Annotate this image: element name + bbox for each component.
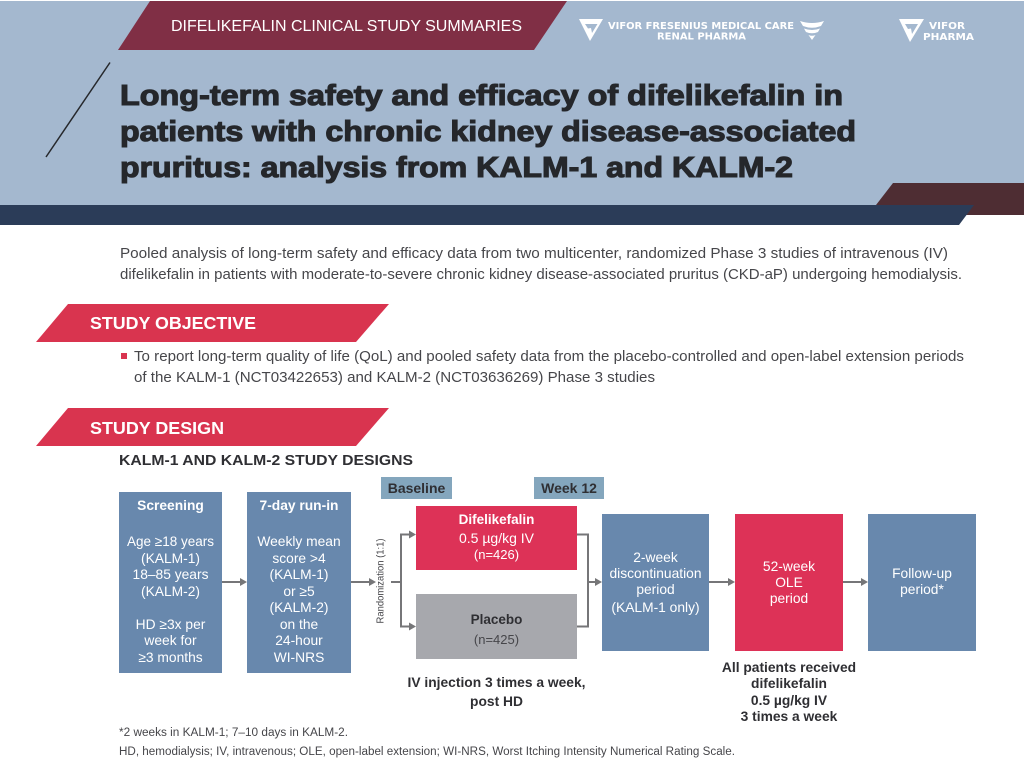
box: OLE: [735, 514, 843, 651]
box: run-in: 24-hour: [275, 633, 323, 648]
box: difelikefalin arm: Difelikefalin: [459, 512, 534, 527]
box: screening: (KALM-1): [141, 551, 200, 566]
box: screening: Age ≥18 years: [127, 534, 214, 549]
objective text: [121, 348, 964, 386]
title: Long-term safety and efficacy of difelikefalin in: [120, 80, 843, 112]
banner: study summaries: [118, 1, 567, 50]
caption: all patients: 0.5 µg/kg IV: [751, 693, 828, 708]
arrows: randomization split: [391, 530, 416, 630]
heading: study design: [36, 408, 389, 446]
heading: study objective: STUDY OBJECTIVE: [90, 313, 256, 333]
footnotes: *2 weeks in KALM-1; 7–10 days in KALM-2.: [119, 727, 348, 739]
box: screening: week for: [143, 633, 197, 648]
caption: IV injection: post HD: [470, 694, 523, 709]
box: OLE: period: [770, 591, 808, 606]
decorative diagonal line: [46, 62, 110, 157]
header panel: [0, 1, 1024, 225]
heading: study design: STUDY DESIGN: [90, 418, 224, 438]
footnotes: HD, hemodialysis; IV, intravenous; OLE, open-label extension; WI-NRS, Worst Itching Intensity Numerical Rating Scale.: [119, 746, 735, 758]
box: discontinuation: discontinuation: [609, 566, 702, 581]
objective text: To report long-term quality of life (QoL) and pooled safety data from the placebo-controlled and open-label extension periods: [134, 348, 964, 365]
box: run-in: or ≥5: [283, 584, 315, 599]
decorative maroon corner: [876, 183, 1024, 215]
box: run-in: 7-day run-in: [260, 498, 338, 513]
objective text: of the KALM-1 (NCT03422653) and KALM-2 (NCT03636269) Phase 3 studies: [134, 369, 655, 386]
box: run-in: WI-NRS: [274, 650, 324, 665]
label: week 12: Week 12: [541, 480, 597, 496]
box: follow-up: [868, 514, 976, 651]
logo: Vifor Fresenius Medical Care Renal Pharma: [579, 19, 824, 42]
box: follow-up: Follow-up: [892, 566, 952, 581]
box: discontinuation: 2-week: [633, 550, 678, 565]
box: difelikefalin arm: [416, 506, 577, 570]
caption: IV injection: [408, 675, 585, 709]
box: placebo arm: [416, 594, 577, 659]
footnotes: [119, 727, 735, 758]
box: run-in: score >4: [272, 551, 326, 566]
label: week 12: [534, 477, 604, 499]
box: screening: Screening: [137, 498, 204, 513]
bullet: [121, 353, 127, 359]
box: placebo arm: Placebo: [471, 612, 522, 627]
box: run-in: (KALM-1): [269, 567, 329, 582]
arrows: arms to discontinuation: [577, 534, 602, 626]
label: baseline: Baseline: [388, 480, 446, 496]
box: OLE: 52-week: [763, 559, 815, 574]
label: baseline: [381, 477, 452, 499]
logo: Vifor Fresenius Medical Care Renal Pharma: RENAL PHARMA: [657, 32, 746, 42]
box: screening: ≥3 months: [138, 650, 203, 665]
box: discontinuation: [602, 514, 709, 651]
arrow: OLE to follow-up: [843, 578, 868, 586]
box: discontinuation: period: [636, 582, 675, 597]
box: run-in: (KALM-2): [269, 600, 329, 615]
caption: all patients: [722, 660, 856, 724]
intro text: Pooled analysis of long-term safety and efficacy data from two multicenter, randomized Phase 3 studies of intravenous (IV): [120, 245, 948, 262]
box: screening: HD ≥3x per: [136, 617, 206, 632]
logo: Vifor Pharma: VIFOR: [929, 21, 965, 32]
box: run-in: on the: [280, 617, 319, 632]
subheading: study designs: KALM-1 AND KALM-2 STUDY DESIGNS: [119, 453, 413, 469]
logo: Vifor Pharma: PHARMA: [923, 32, 974, 43]
box: discontinuation: (KALM-1 only): [611, 600, 700, 615]
logo: Vifor Fresenius Medical Care Renal Pharma: VIFOR FRESENIUS MEDICAL CARE: [608, 21, 794, 32]
caption: all patients: 3 times a week: [741, 709, 838, 724]
caption: all patients: All patients received: [722, 660, 856, 675]
title: patients with chronic kidney disease-associated: [120, 116, 856, 148]
box: difelikefalin arm: 0.5 µg/kg IV: [459, 530, 535, 546]
title: [120, 80, 856, 184]
label: randomization: Randomization (1:1): [376, 538, 386, 624]
box: follow-up: period*: [900, 582, 944, 597]
arrow: screening to run-in: [222, 578, 247, 586]
intro text: difelikefalin in patients with moderate-to-severe chronic kidney disease-associated pruritus (CKD-aP) undergoing hemodialysis.: [120, 266, 962, 283]
arrow: discontinuation to OLE: [709, 578, 735, 586]
caption: all patients: difelikefalin: [751, 676, 827, 691]
dark blue bar: [0, 205, 974, 225]
box: run-in: Weekly mean: [257, 534, 341, 549]
arrow: run-in to randomization: [351, 578, 376, 586]
box: run-in: [247, 492, 351, 673]
box: difelikefalin arm: (n=426): [474, 547, 519, 562]
title: pruritus: analysis from KALM-1 and KALM-2: [120, 152, 793, 184]
logo: Vifor Pharma: [899, 19, 974, 43]
banner: study summaries: DIFELIKEFALIN CLINICAL STUDY SUMMARIES: [171, 18, 522, 35]
intro text: [120, 245, 962, 283]
box: placebo arm: (n=425): [474, 632, 519, 647]
box: screening: [119, 492, 222, 673]
box: screening: (KALM-2): [141, 584, 200, 599]
box: screening: 18–85 years: [133, 567, 209, 582]
caption: IV injection: IV injection 3 times a week,: [408, 675, 585, 690]
heading: study objective: [36, 304, 389, 342]
box: OLE: OLE: [775, 575, 803, 590]
